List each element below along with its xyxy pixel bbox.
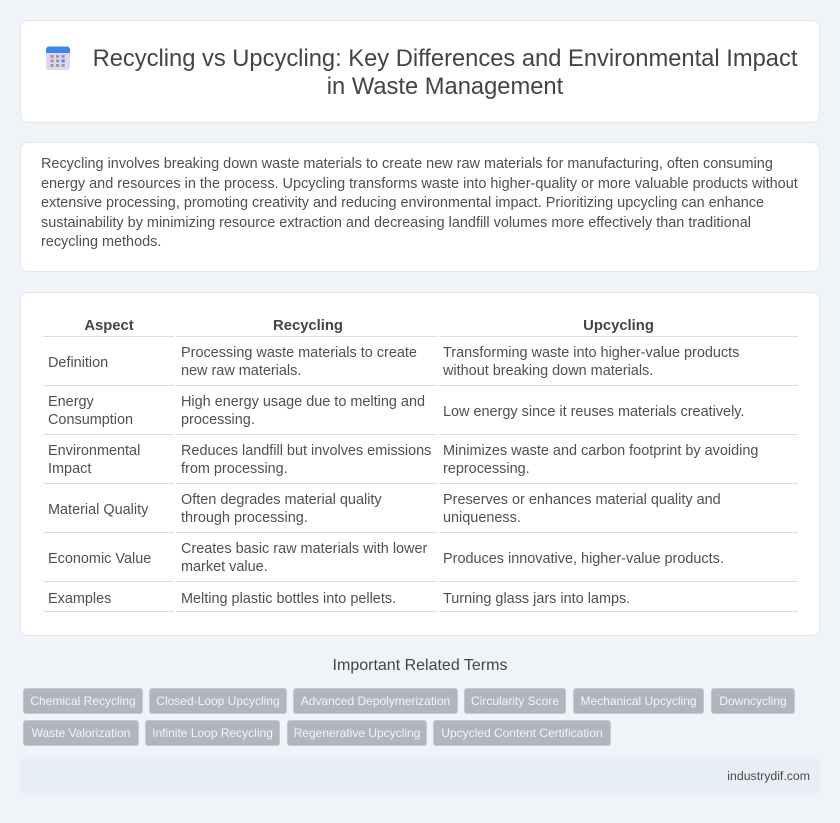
footer bar — [20, 759, 820, 793]
intro paragraph: Recycling involves breaking down waste materials to create new raw materials for manufacturing, often consuming — [41, 156, 773, 172]
table header — [43, 318, 798, 337]
row: environmental impact: from processing. — [181, 461, 288, 477]
row: definition: new raw materials. — [181, 363, 301, 379]
row: economic value: market value. — [181, 559, 268, 575]
tag: Upcycled Content Certification — [441, 726, 603, 740]
row: economic value: Economic Value — [48, 551, 151, 567]
tag: Waste Valorization — [32, 726, 130, 740]
row: environmental impact: reprocessing. — [443, 461, 530, 477]
tag: Circularity Score — [471, 694, 559, 708]
row: environmental impact: Impact — [48, 461, 91, 477]
panel: title card — [20, 20, 820, 123]
footer source: industrydif.com — [727, 769, 810, 783]
row: material quality — [43, 492, 798, 533]
tag — [23, 720, 139, 746]
row: environmental impact: Reduces landfill but involves emissions — [181, 443, 431, 459]
intro paragraph: energy and resources in the process. Upcycling transforms waste into higher-quality or more valuable products without — [41, 176, 798, 192]
row: economic value — [43, 541, 798, 582]
row: environmental impact: Minimizes waste and carbon footprint by avoiding — [443, 443, 758, 459]
row: examples — [43, 591, 798, 612]
row: examples: Melting plastic bottles into pellets. — [181, 591, 396, 607]
tag — [287, 720, 427, 746]
row: definition: Transforming waste into higher-value products — [443, 345, 739, 361]
heading: related terms: Important Related Terms — [333, 657, 507, 674]
row: energy consumption: Low energy since it reuses materials creatively. — [443, 404, 744, 420]
row: definition: Processing waste materials to create — [181, 345, 417, 361]
row: environmental impact: Environmental — [48, 443, 140, 459]
tag — [293, 688, 458, 714]
row: material quality: Preserves or enhances material quality and — [443, 492, 721, 508]
tag: Infinite Loop Recycling — [152, 726, 273, 740]
intro paragraph: extensive processing, promoting creativity and reducing environmental impact. Prioritizing upcycling can enhance — [41, 195, 764, 211]
panel: comparison table — [20, 292, 820, 636]
row: economic value: Creates basic raw materials with lower — [181, 541, 427, 557]
row: energy consumption — [43, 394, 798, 435]
row: examples: Turning glass jars into lamps. — [443, 591, 630, 607]
tag — [711, 688, 795, 714]
tag — [23, 688, 143, 714]
table header: Recycling — [273, 318, 343, 334]
row: definition: without breaking down materials. — [443, 363, 653, 379]
tag: Closed-Loop Upcycling — [156, 694, 280, 708]
intro paragraph — [41, 156, 798, 250]
row: examples: Examples — [48, 591, 111, 607]
row: definition — [43, 345, 798, 386]
tag — [145, 720, 280, 746]
tag list: related terms — [23, 688, 795, 746]
tag: Mechanical Upcycling — [580, 694, 697, 708]
row: environmental impact — [43, 443, 798, 484]
row: material quality: Often degrades material quality — [181, 492, 382, 508]
tag — [149, 688, 287, 714]
row: definition: Definition — [48, 355, 108, 371]
tag: Advanced Depolymerization — [301, 694, 450, 708]
tag: Regenerative Upcycling — [294, 726, 420, 740]
row: energy consumption: High energy usage due to melting and — [181, 394, 425, 410]
row: energy consumption: processing. — [181, 412, 255, 428]
table header: Aspect — [84, 318, 134, 334]
table header: Upcycling — [583, 318, 654, 334]
intro paragraph: recycling methods. — [41, 234, 161, 250]
panel: intro text — [20, 142, 820, 272]
row: material quality: uniqueness. — [443, 510, 521, 526]
tag — [433, 720, 611, 746]
row: material quality: Material Quality — [48, 502, 148, 518]
row: energy consumption: Energy — [48, 394, 94, 410]
row: material quality: through processing. — [181, 510, 308, 526]
title — [93, 46, 798, 100]
row: economic value: Produces innovative, higher-value products. — [443, 551, 724, 567]
tag: Chemical Recycling — [30, 694, 136, 708]
tag: Downcycling — [719, 694, 787, 708]
row: energy consumption: Consumption — [48, 412, 133, 428]
tag — [573, 688, 704, 714]
title: in Waste Management — [327, 74, 563, 100]
title: Recycling vs Upcycling: Key Differences and Environmental Impact — [93, 46, 797, 72]
tag — [464, 688, 566, 714]
intro paragraph: sustainability by minimizing resource extraction and decreasing landfill volumes more effectively than traditional — [41, 215, 751, 231]
icon: calendar — [46, 46, 70, 70]
